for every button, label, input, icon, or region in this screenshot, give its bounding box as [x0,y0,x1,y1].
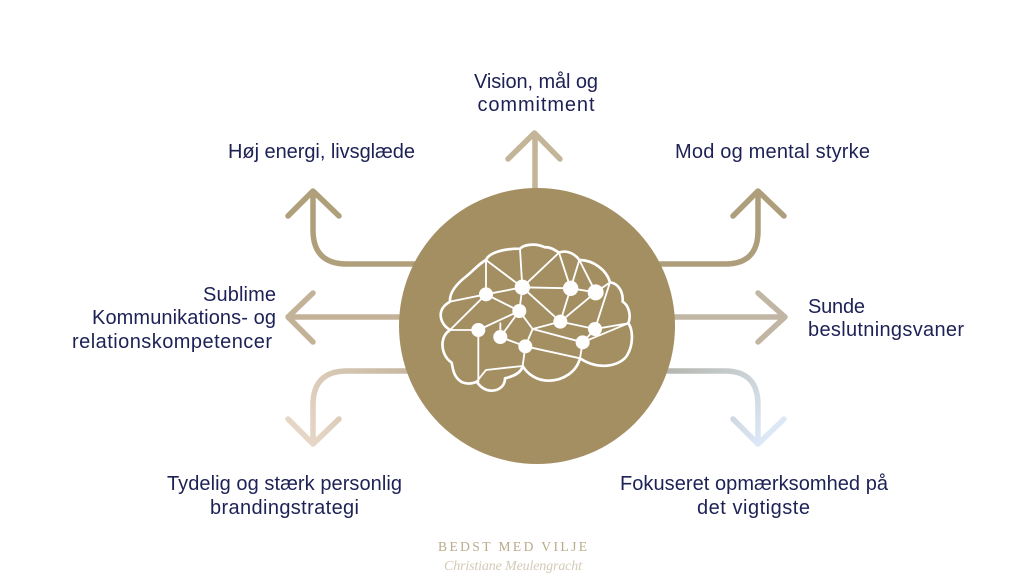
logo: signature: Christiane Meulengracht [444,559,583,574]
label: communication: relationskompetencer [72,331,272,353]
label: focus: Fokuseret opmærksomhed på [620,473,889,495]
label: energy: Høj energi, livsglæde [228,141,415,163]
label: vision [474,71,598,116]
label: focus: det vigtigste [697,497,810,519]
label: decisions [808,296,964,341]
label: communication: Sublime [203,284,276,306]
logo: brand name: BEDST MED VILJE [438,539,587,554]
arrow: upper left [288,191,415,264]
label: vision: Vision, mål og [474,71,598,93]
arrow: lower left [288,371,407,444]
icon: brain network [441,245,632,391]
arrow: middle right [675,293,785,342]
label: communication [72,284,276,353]
label: branding: brandingstrategi [210,497,359,519]
label: courage: Mod og mental styrke [675,141,870,163]
arrow: middle left [288,293,400,342]
label: decisions: Sunde [808,296,865,318]
label: branding [167,473,402,519]
arrow: lower right [668,371,784,444]
arrow: upper right [660,191,784,264]
label: decisions: beslutningsvaner [808,319,964,341]
arrow: top [508,133,560,188]
label: vision: commitment [478,94,595,116]
label: communication: Kommunikations- og [92,307,276,329]
label: branding: Tydelig og stærk personlig [167,473,402,495]
central circle [399,188,675,464]
label: focus [620,473,889,519]
